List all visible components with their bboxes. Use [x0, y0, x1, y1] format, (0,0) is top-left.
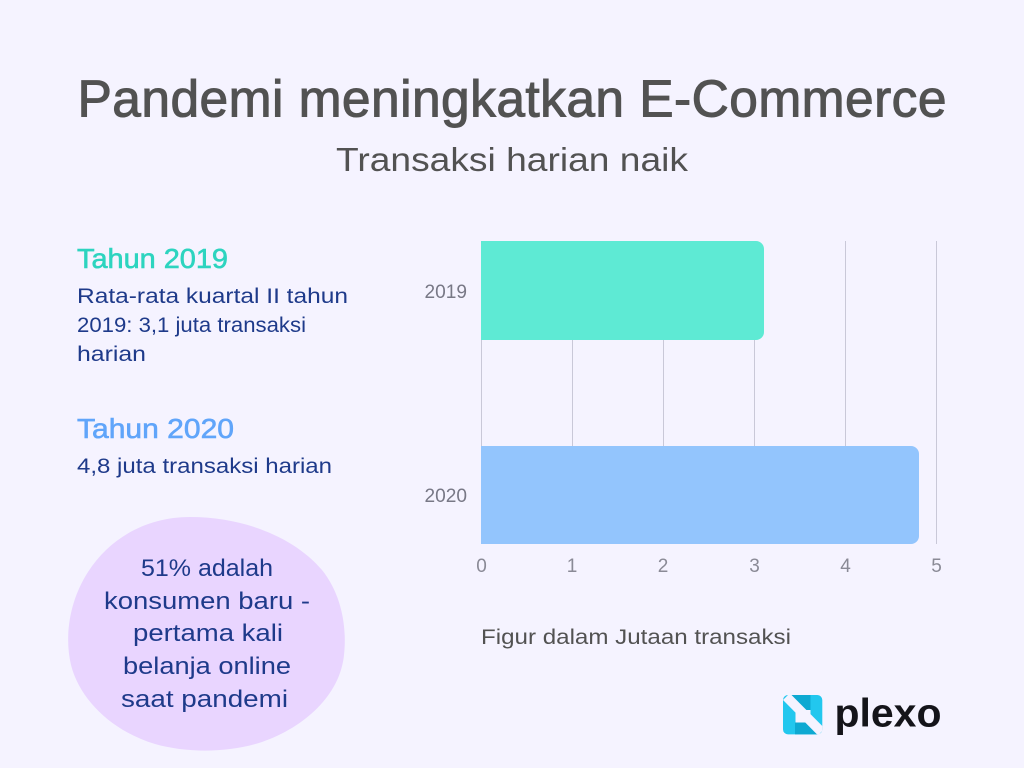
axis labels: 0: [476, 556, 487, 577]
callout text: konsumen baru -: [104, 588, 310, 615]
axis labels: 5: [931, 556, 942, 577]
axis labels: 3: [749, 556, 760, 577]
bar: 2019: [481, 241, 764, 340]
callout: new consumers blob: [68, 517, 345, 751]
description: 2019: 2019: 3,1 juta transaksi: [77, 314, 306, 337]
description: 2019: [77, 285, 348, 366]
icon: plexo mark: [783, 695, 822, 734]
callout text: saat pandemi: [121, 686, 288, 713]
category labels: [424, 282, 467, 507]
axis labels: [476, 556, 942, 577]
blob shape: [68, 517, 345, 751]
bar chart: [424, 241, 942, 577]
callout text: pertama kali: [133, 620, 283, 647]
callout text: [104, 555, 310, 713]
description: 2019: Rata-rata kuartal II tahun: [77, 285, 348, 308]
logo wordmark: plexo: [834, 692, 942, 736]
callout text: belanja online: [123, 653, 291, 680]
category labels: 2019: [424, 282, 467, 303]
title: Pandemi meningkatkan E-Commerce: [78, 70, 946, 128]
text block: 2020: [77, 413, 332, 478]
description: 2019: harian: [77, 343, 146, 366]
bar: 2020: [481, 446, 919, 544]
axis labels: 2: [658, 556, 668, 577]
chart note: Figur dalam Jutaan transaksi: [481, 626, 791, 649]
logo: plexo: [783, 692, 942, 736]
description: 2020: 4,8 juta transaksi harian: [77, 455, 332, 478]
subtitle: Transaksi harian naik: [336, 141, 689, 178]
axis labels: 4: [840, 556, 851, 577]
text block: 2019: [77, 243, 348, 366]
heading: Tahun 2019: Tahun 2019: [77, 243, 228, 274]
category labels: 2020: [424, 486, 467, 507]
axis labels: 1: [567, 556, 577, 577]
heading: Tahun 2020: Tahun 2020: [77, 413, 234, 444]
callout text: 51% adalah: [141, 555, 273, 582]
